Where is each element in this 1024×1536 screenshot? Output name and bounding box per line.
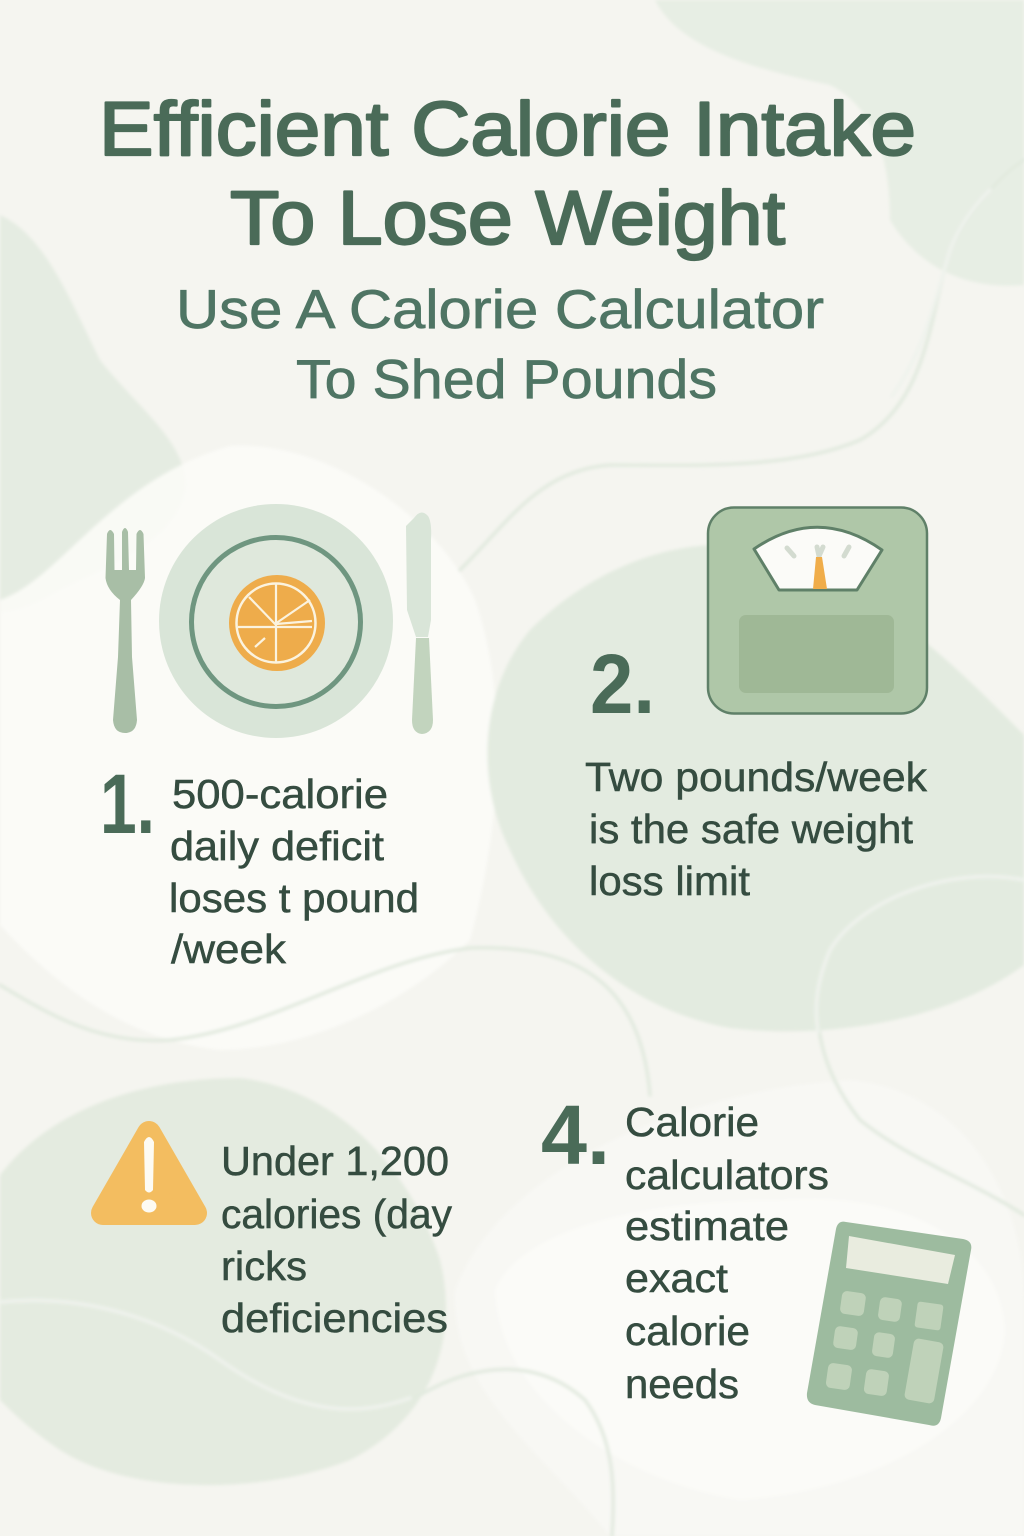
step 3 text: Under 1,200 xyxy=(221,1138,449,1184)
step 1 text: loses t pound xyxy=(169,875,419,921)
step 4 text xyxy=(625,1099,829,1407)
calculator buttons xyxy=(825,1290,944,1404)
step 2 text: is the safe weight xyxy=(589,806,914,852)
icon: bathroom scale xyxy=(708,508,927,714)
step 2 text: loss limit xyxy=(589,858,751,904)
step 3 text: deficiencies xyxy=(221,1295,448,1341)
step 3 text xyxy=(221,1138,452,1341)
orange slice xyxy=(229,575,325,671)
icon: calculator xyxy=(807,1222,971,1426)
icon: warning triangle xyxy=(103,1133,195,1213)
step 3 text: calories (day xyxy=(221,1191,452,1237)
title: To Lose Weight xyxy=(230,176,785,261)
plate inner ring xyxy=(192,538,360,706)
step 1 text: 500-calorie xyxy=(172,771,388,817)
subtitle xyxy=(176,278,824,410)
step 4 text: Calorie xyxy=(625,1099,759,1145)
plate rim xyxy=(159,504,393,738)
step 3 text: ricks xyxy=(221,1243,307,1289)
title xyxy=(99,87,916,261)
step 4 text: calculators xyxy=(625,1152,829,1198)
step 4 text: estimate xyxy=(625,1203,789,1249)
step 1 number: 1. xyxy=(100,757,155,851)
icon: knife xyxy=(406,512,433,734)
step 4 text: needs xyxy=(625,1361,739,1407)
calculator screen xyxy=(846,1236,955,1284)
step 2 text xyxy=(585,754,928,904)
step 4 number: 4. xyxy=(541,1088,610,1182)
step 1 text: daily deficit xyxy=(170,823,385,869)
step 1 text: /week xyxy=(171,926,287,972)
scale display panel xyxy=(739,615,894,693)
scale dial xyxy=(754,527,882,590)
step 4 text: exact xyxy=(625,1255,729,1301)
step 1 text xyxy=(169,771,419,972)
subtitle: Use A Calorie Calculator xyxy=(176,278,824,340)
step 2 text: Two pounds/week xyxy=(585,754,928,800)
icon: plate with orange slice xyxy=(159,504,393,738)
title: Efficient Calorie Intake xyxy=(99,87,916,172)
step 2 number: 2. xyxy=(590,637,655,731)
subtitle: To Shed Pounds xyxy=(296,348,717,410)
step 4 text: calorie xyxy=(625,1308,750,1354)
icon: fork xyxy=(106,528,145,733)
